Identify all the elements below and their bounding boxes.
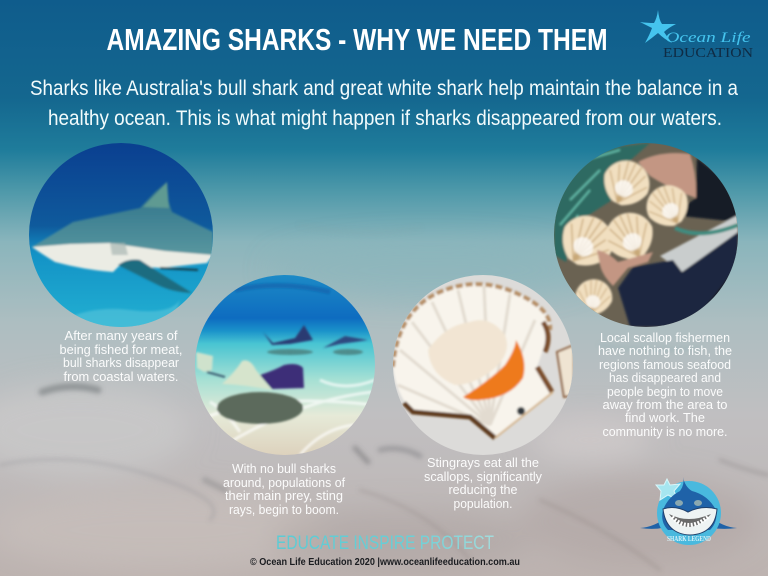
caption: stingrays: With no bull sharks xyxy=(232,461,336,476)
icon: star xyxy=(656,479,680,500)
panel: scallop fishermen photo xyxy=(551,143,738,327)
caption: scallops: population. xyxy=(454,496,512,511)
badge: Shark Legend: SHARK LEGEND xyxy=(667,535,711,543)
shark body xyxy=(32,182,213,258)
caption: fishermen: people begin to move xyxy=(607,384,723,399)
white box xyxy=(660,215,738,272)
caption: shark xyxy=(60,328,182,384)
fishing net xyxy=(554,143,650,262)
logo: Ocean Life Education: Ocean Life xyxy=(666,30,751,46)
grin xyxy=(663,508,717,535)
scallop shell xyxy=(393,284,553,438)
fins xyxy=(640,516,737,529)
caption: shark: from coastal waters. xyxy=(64,369,178,384)
shells xyxy=(602,158,651,207)
caption: stingrays: around, populations of xyxy=(223,475,345,490)
icon: starfish xyxy=(640,10,676,43)
caption: scallops: reducing the xyxy=(448,482,518,497)
dark sleeve xyxy=(686,158,736,222)
caption: scallops: Stingrays eat all the xyxy=(427,455,539,470)
logo: Ocean Life Education xyxy=(640,10,753,61)
caption: fishermen: have nothing to fish, the xyxy=(598,343,732,358)
caption: fishermen xyxy=(598,330,732,439)
main ray xyxy=(222,360,272,390)
caption: stingrays: their main prey, sting xyxy=(225,488,343,503)
copyright line: © Ocean Life Education 2020 |www.oceanlifeeducation.com.au xyxy=(250,557,520,568)
caption: fishermen: find work. The xyxy=(625,410,705,425)
rope xyxy=(675,225,738,233)
caption: fishermen: away from the area to xyxy=(602,397,728,412)
logo: Ocean Life Education: EDUCATION xyxy=(663,46,753,61)
jacket xyxy=(618,232,738,327)
far rays xyxy=(263,325,313,345)
caption: fishermen: regions famous seafood xyxy=(599,357,731,372)
side shell xyxy=(557,345,574,397)
tagline: EDUCATE INSPIRE PROTECT xyxy=(276,533,494,554)
panel: stingrays photo xyxy=(195,275,375,455)
shark head xyxy=(662,477,716,530)
lower hand xyxy=(597,250,653,286)
caption: fishermen: community is no more. xyxy=(602,424,728,439)
badge: Shark Legend xyxy=(640,477,737,545)
panel: scallop photo xyxy=(393,275,574,456)
pectoral fin xyxy=(118,260,192,293)
caption: stingrays xyxy=(223,461,345,517)
upper hand xyxy=(638,153,696,198)
eyes xyxy=(675,500,683,506)
caption: stingrays: rays, begin to boom. xyxy=(229,502,339,517)
caption: scallops: scallops, significantly xyxy=(424,469,542,484)
title: AMAZING SHARKS - WHY WE NEED THEM xyxy=(106,22,608,57)
intro text xyxy=(30,77,738,130)
ray shadow xyxy=(217,392,303,424)
caption: scallops xyxy=(424,455,542,511)
caption: fishermen: Local scallop fishermen xyxy=(600,330,730,345)
caption: shark: being fished for meat, xyxy=(60,342,182,357)
caption: shark: After many years of xyxy=(64,328,178,343)
scallop meat xyxy=(428,320,507,385)
panel: bull shark photo xyxy=(29,143,213,330)
caption: shark: bull sharks disappear xyxy=(63,355,180,370)
orange roe xyxy=(463,340,524,400)
caption: fishermen: has disappeared and xyxy=(609,370,721,385)
